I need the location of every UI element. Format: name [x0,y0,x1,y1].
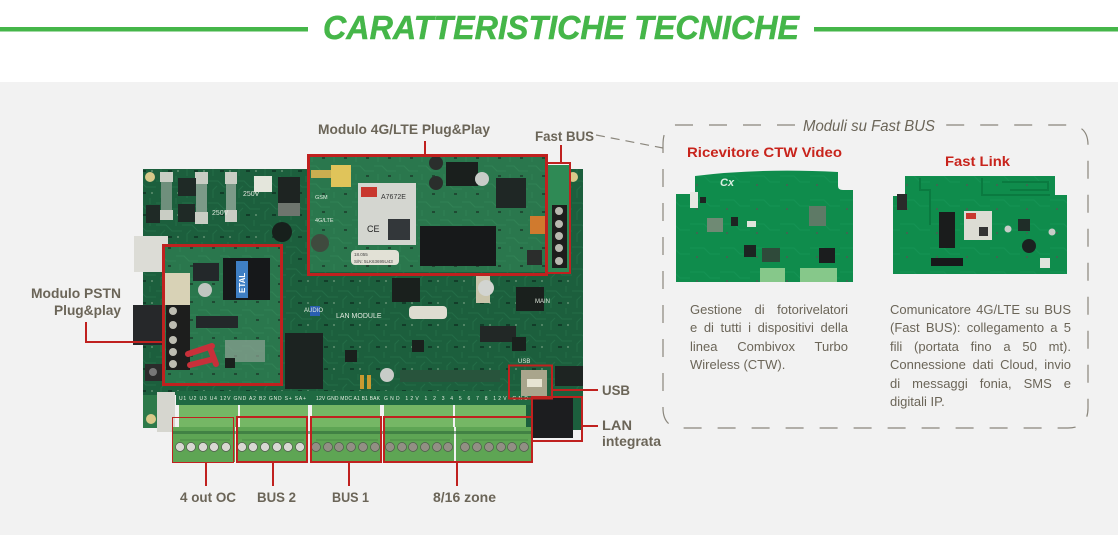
fuses: 250V [212,210,229,217]
board base [143,169,583,395]
board labels strip: 12V GND MDC A1 B1 BAK [316,396,381,402]
board callout labels: BUS 1 [332,489,369,505]
board callout labels [31,121,661,505]
board callout labels: Fast BUS [535,128,594,144]
board labels strip: U1 U2 U3 U4 12V GND A2 B2 GND S+ SA+ [179,396,306,402]
centre components: MAIN [535,299,550,305]
board callout labels: Modulo 4G/LTE Plug&Play [318,121,490,137]
4G/LTE module board: GSM [315,195,328,201]
dashed Fast BUS modules frame [596,125,1088,428]
CTW Video receiver board: Cx [720,177,735,189]
title: CARATTERISTICHE TECNICHE [323,9,800,46]
text: Fast Link description: di messaggi fonia, SMS e [890,376,1071,391]
PSTN module board [165,247,280,383]
4G/LTE module board: S/N: 5LK63695U43 [354,259,393,264]
4G/LTE module board: 18.055 [354,252,368,257]
text: CTW Video description: linea Combivox Turbo [690,339,848,354]
text: Fast Link description: Connessione dati Cloud, invio [890,357,1071,372]
PSTN module board: ETAL [238,273,247,293]
text: Fast Link description: digitali IP. [890,394,945,409]
text: Fast Link description: Comunicatore 4G/LTE su BUS [890,302,1071,317]
CTW Video receiver board [676,171,853,282]
relay left [133,305,164,345]
board callout labels: 8/16 zone [433,489,496,505]
control board photo [133,156,583,462]
board callout labels: Modulo PSTN [31,285,121,301]
centre components [285,273,583,389]
board callout labels: integrata [602,433,661,449]
text: Fast Link description: (Fast BUS): collegamento a 5 [890,320,1071,335]
fuses: 250V [243,191,260,198]
4G/LTE module board: CE [367,224,380,234]
board labels strip: GND 12V 1 2 3 4 5 6 7 8 12V GND [384,396,528,402]
board callout labels: USB [602,382,630,398]
leader lines [86,141,598,486]
frame heading: Moduli su Fast BUS [803,118,936,135]
board callout labels: LAN [602,417,632,433]
4G/LTE module board [310,156,547,272]
centre components: USB [518,359,530,365]
text: CTW Video description [690,302,848,372]
heading: Fast Link: Fast Link [945,153,1010,169]
red highlight boxes [164,156,582,462]
terminal blocks [173,405,532,462]
bottom-left connector [157,392,175,432]
button [145,364,162,381]
heading: Ricevitore CTW Video: Ricevitore CTW Video [687,144,842,160]
text: CTW Video description: Wireless (CTW). [690,357,785,372]
fuses [146,172,300,242]
white connector left [134,236,168,272]
text: CTW Video description: Gestione di fotorivelatori [690,302,848,317]
title [0,9,1118,46]
text: CTW Video description: e di tutti i dispositivi della [690,320,848,335]
LAN connector [533,398,573,438]
USB connector [521,370,547,396]
4G/LTE module board: 4G/LTE [315,218,334,224]
board callout labels: Plug&play [54,302,121,318]
Fast BUS terminal [547,165,569,272]
centre components: AUDIO [304,308,323,314]
Fast Link board [893,176,1067,274]
board callout labels: 4 out OC [180,489,236,505]
text: Fast Link description: fili (portata fino a 50 mt). [890,339,1071,354]
board labels strip [176,391,531,405]
text: Fast Link description [890,302,1071,409]
board callout labels: BUS 2 [257,489,296,505]
centre components: LAN MODULE [336,313,382,320]
4G/LTE module board: A7672E [381,194,406,201]
